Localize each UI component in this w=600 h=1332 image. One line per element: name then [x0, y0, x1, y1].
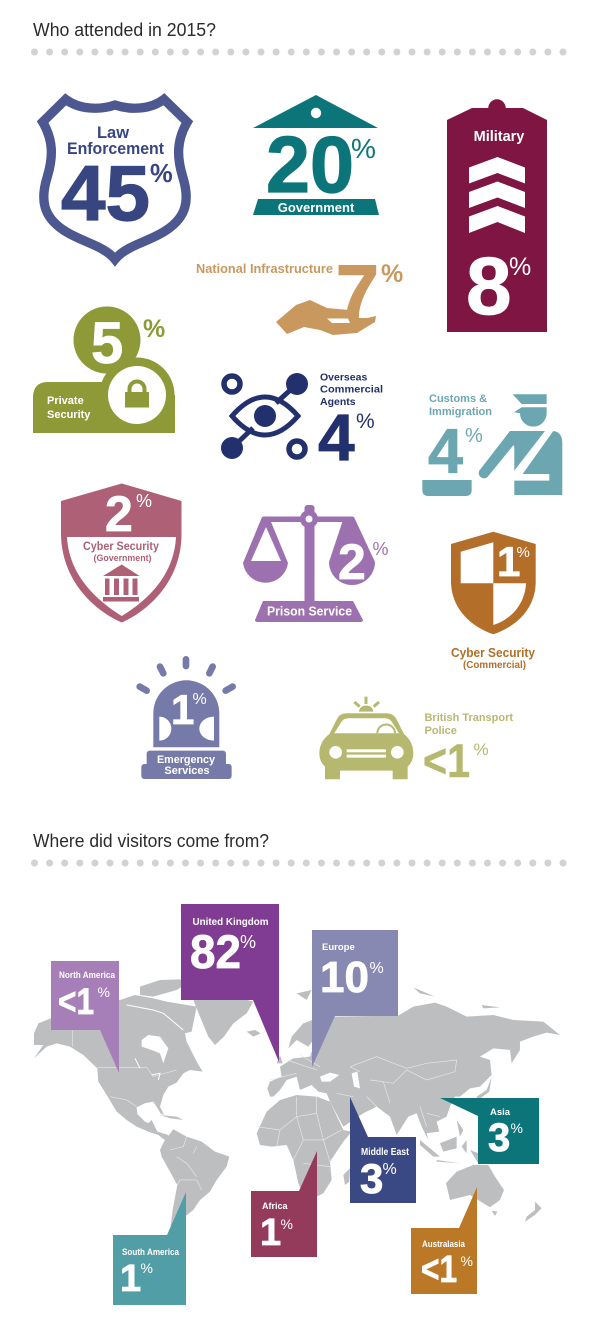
- panel: emergency services 1%: Services: [164, 765, 210, 777]
- panel: british transport police <1%: British Transport: [424, 712, 513, 724]
- callout: north america: [51, 961, 119, 1073]
- panel: customs and immigration 4%: Immigration: [429, 406, 492, 418]
- panel: british transport police <1%: %: [474, 740, 489, 759]
- panel: emergency services 1%: 1: [171, 686, 194, 733]
- callout: australasia: <1: [421, 1249, 457, 1291]
- panel: customs and immigration 4%: 4: [428, 417, 463, 487]
- panel: law enforcement 45%: [43, 99, 187, 259]
- panel: customs and immigration 4%: %: [465, 425, 483, 447]
- panel: private security 5%: Private: [47, 395, 84, 407]
- panel: law enforcement 45%: Law: [97, 124, 129, 142]
- panel: private security 5%: Security: [47, 409, 91, 421]
- heading: where did visitors come from: Where did visitors come from?: [33, 831, 269, 851]
- callout: asia: Asia: [490, 1107, 511, 1118]
- callout: asia: 3: [488, 1116, 510, 1160]
- callout: africa: [251, 1151, 317, 1257]
- panel: british transport police <1%: Police: [424, 725, 457, 737]
- callout: middle east: [350, 1097, 416, 1203]
- panel: emergency services 1%: %: [192, 691, 207, 708]
- panel: military 8%: 8: [466, 241, 512, 332]
- icon: hand: [276, 300, 376, 335]
- callout: united kingdom: %: [240, 932, 256, 952]
- panel: private security 5%: [33, 306, 175, 433]
- panel: cyber security government 2%: [61, 484, 182, 622]
- callout: europe: Europe: [322, 942, 355, 953]
- callout: north america: North America: [59, 970, 115, 980]
- panel: prison service 2%: %: [372, 539, 389, 559]
- panel: law enforcement 45%: 45: [61, 149, 150, 237]
- panel: prison service 2%: 2: [338, 534, 366, 590]
- callout: united kingdom: 82: [190, 925, 241, 978]
- panel: government 20%: Government: [278, 200, 355, 215]
- panel: emergency services 1%: [140, 659, 233, 779]
- callout: australasia: [411, 1187, 477, 1294]
- panel: overseas commercial agents 4%: [221, 372, 383, 474]
- panel: cyber security commercial 1%: %: [516, 544, 530, 561]
- panel: prison service 2%: [243, 505, 389, 622]
- panel: military 8%: %: [509, 253, 531, 281]
- callout: north america: %: [98, 984, 110, 1000]
- panel: british transport police <1%: [319, 697, 513, 787]
- panel: prison service 2%: Prison Service: [267, 604, 352, 618]
- callout: united kingdom: United Kingdom: [192, 916, 268, 928]
- callout: south america: [113, 1192, 186, 1305]
- panel: national infrastructure 7%: %: [381, 260, 403, 288]
- callout: middle east: %: [382, 1161, 397, 1178]
- panel: cyber security government 2%: %: [136, 491, 152, 511]
- panel: overseas commercial agents 4%: Commercial: [320, 384, 383, 396]
- callout: australasia: Australasia: [422, 1239, 466, 1250]
- panel: cyber security commercial 1%: [451, 532, 536, 671]
- callout: africa: Africa: [262, 1201, 289, 1211]
- panel: national infrastructure 7%: [196, 250, 403, 336]
- panel: military 8%: Military: [474, 129, 524, 145]
- panel: cyber security government 2%: (Government): [94, 553, 152, 564]
- callout: asia: %: [510, 1120, 523, 1136]
- callout: south america: 1: [120, 1258, 141, 1300]
- panel: cyber security commercial 1%: (Commercial): [463, 660, 526, 671]
- world map: [34, 979, 560, 1232]
- panel: government 20%: 20: [266, 120, 354, 209]
- panel: national infrastructure 7%: National Infrastructure: [196, 262, 333, 276]
- panel: cyber security government 2%: Cyber Security: [83, 539, 159, 553]
- panel: emergency services 1%: Emergency: [157, 754, 216, 766]
- panel: private security 5%: %: [143, 315, 165, 343]
- callout: africa: %: [280, 1216, 293, 1232]
- panel: overseas commercial agents 4%: Overseas: [320, 372, 367, 384]
- icon: police car: [319, 697, 413, 779]
- panel: customs and immigration 4%: Customs &: [429, 393, 487, 405]
- panel: british transport police <1%: <1: [423, 734, 470, 787]
- icon: siren: [140, 659, 233, 779]
- callout: south america: %: [140, 1260, 153, 1276]
- panel: overseas commercial agents 4%: 4: [318, 400, 355, 474]
- panel: cyber security commercial 1%: 1: [497, 538, 520, 585]
- callout: united kingdom: [181, 904, 279, 1062]
- panel: law enforcement 45%: Enforcement: [67, 140, 164, 158]
- icon: officer at desk: [422, 394, 562, 496]
- panel: military 8%: [447, 99, 547, 332]
- callout: north america: <1: [58, 981, 94, 1022]
- callout: africa: 1: [260, 1212, 281, 1254]
- icon: scales: [243, 505, 375, 622]
- heading: who attended: Who attended in 2015?: [33, 20, 216, 40]
- panel: cyber security government 2%: 2: [105, 486, 133, 542]
- panel: overseas commercial agents 4%: Agents: [320, 396, 356, 408]
- callout: south america: South America: [122, 1247, 180, 1257]
- callout: middle east: 3: [360, 1155, 383, 1202]
- callout: middle east: Middle East: [361, 1147, 410, 1158]
- panel: cyber security commercial 1%: Cyber Security: [451, 645, 536, 660]
- panel: overseas commercial agents 4%: %: [356, 410, 375, 433]
- callout: europe: %: [370, 960, 384, 977]
- panel: private security 5%: 5: [91, 311, 123, 376]
- icon: eye network: [221, 373, 308, 459]
- callout: europe: 10: [320, 953, 369, 1002]
- panel: national infrastructure 7%: 7: [336, 250, 379, 336]
- callout: asia: [440, 1098, 539, 1164]
- panel: government 20%: [253, 95, 379, 215]
- callout: australasia: %: [460, 1253, 473, 1269]
- panel: law enforcement 45%: %: [150, 160, 173, 188]
- icon: government building: [103, 564, 140, 602]
- panel: government 20%: %: [351, 133, 376, 164]
- panel: customs and immigration 4%: [422, 393, 562, 496]
- callout: europe: [312, 930, 398, 1067]
